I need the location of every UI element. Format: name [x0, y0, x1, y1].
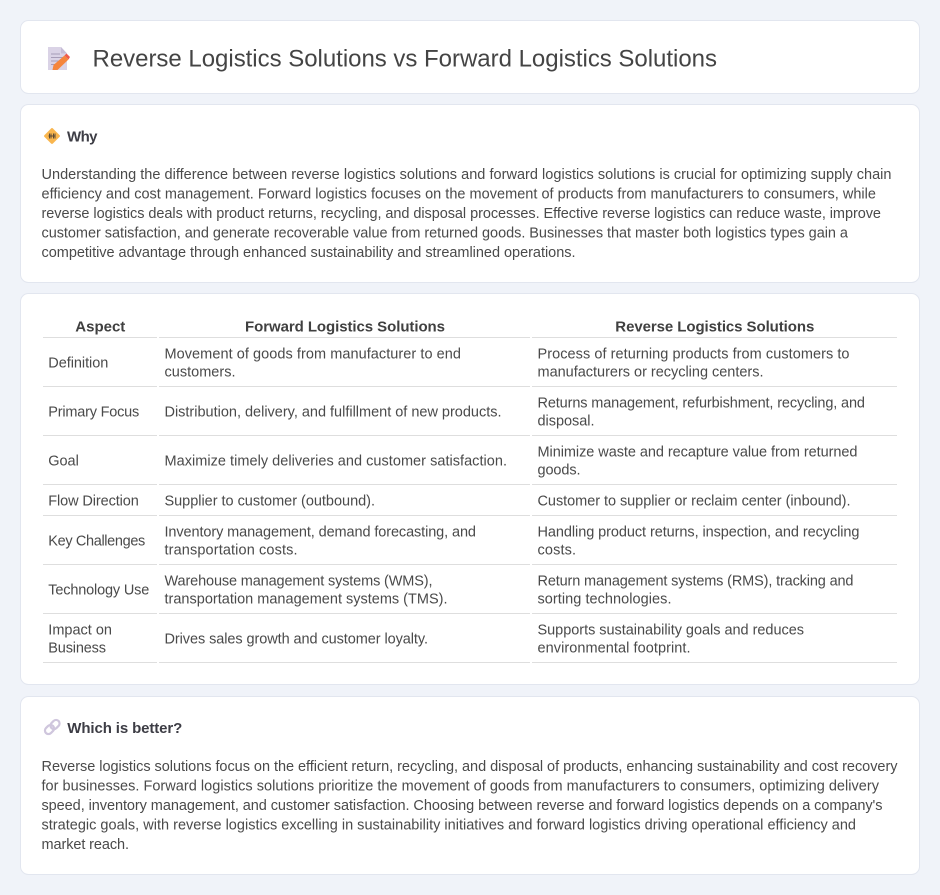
row: key challenges: transportation costs. — [164, 542, 298, 558]
icon: chain link — [43, 718, 61, 736]
row: flow direction: Customer to supplier or reclaim center (inbound). — [538, 494, 850, 510]
row: goal: Goal — [48, 454, 79, 470]
row: impact on business: environmental footprint. — [538, 640, 690, 656]
panel: which is better — [20, 696, 920, 874]
row: goal — [48, 444, 858, 478]
text block: why explanation — [42, 167, 892, 261]
text block: why explanation: efficiency and cost management. Forward logistics focuses on the movement of products from manufacturers to consumers, while — [42, 186, 876, 202]
row: technology use — [48, 574, 854, 608]
row: primary focus: Distribution, delivery, and fulfillment of new products. — [164, 404, 502, 420]
row: flow direction — [48, 494, 851, 510]
row: definition: manufacturers or recycling centers. — [538, 364, 764, 380]
row: key challenges: Handling product returns, inspection, and recycling — [538, 524, 860, 540]
text block: which is better explanation: Reverse logistics solutions focus on the efficient return, recycling, and disposal of products, enhancing sustainability and cost recovery — [42, 759, 898, 775]
heading: which is better: Which is better? — [67, 720, 182, 737]
text block: why explanation: reverse logistics deals with product returns, recycling, and disposal processes. Effective reverse logistics can reduce waste, improve — [42, 206, 881, 222]
row: impact on business — [48, 622, 804, 656]
row: goal: Minimize waste and recapture value from returned — [538, 444, 858, 460]
row: key challenges: Inventory management, demand forecasting, and — [164, 524, 476, 540]
table header row: Aspect — [75, 318, 125, 336]
row: impact on business: Impact on — [48, 622, 112, 638]
row: impact on business: Drives sales growth and customer loyalty. — [164, 632, 428, 648]
text block: which is better explanation: market reach. — [42, 837, 129, 853]
row: primary focus: Primary Focus — [48, 404, 139, 420]
text block: why explanation: competitive advantage through enhanced sustainability and streamlined operations. — [42, 245, 576, 261]
table header row: Reverse Logistics Solutions — [615, 318, 814, 336]
row: impact on business: Supports sustainability goals and reduces — [538, 622, 804, 638]
row: technology use: Return management systems (RMS), tracking and — [538, 574, 854, 590]
icon: warning diamond — [44, 128, 60, 144]
row: key challenges: Key Challenges — [48, 534, 145, 550]
row: technology use: Technology Use — [48, 582, 149, 598]
heading: why: Why — [67, 128, 98, 146]
text block: which is better explanation — [42, 759, 898, 853]
text block: why explanation: customer satisfaction, and generate recoverable value from returned goods. Businesses that master both logistics types gain a — [42, 226, 849, 242]
text block: which is better explanation: strategic goals, with reverse logistics excelling in sustainability initiatives and forward logistics driving operational efficiency and — [42, 818, 856, 834]
row: definition — [48, 346, 850, 380]
icon: document with pencil — [48, 47, 70, 70]
panel: title header — [20, 20, 920, 94]
row: flow direction: Supplier to customer (outbound). — [164, 494, 375, 510]
row: definition: Movement of goods from manufacturer to end — [164, 346, 461, 362]
text block: which is better explanation: for businesses. Forward logistics solutions prioritize the movement of goods from manufacturers to consumers, optimizing delivery — [42, 778, 880, 794]
row: key challenges: costs. — [538, 542, 576, 558]
table header row — [75, 318, 814, 336]
row: definition: Process of returning products from customers to — [538, 346, 850, 362]
row: key challenges — [48, 524, 860, 558]
row: impact on business: Business — [48, 640, 106, 656]
row: goal: Maximize timely deliveries and customer satisfaction. — [164, 454, 507, 470]
row: goal: goods. — [538, 462, 580, 478]
panel: comparison table — [20, 294, 920, 684]
text block: which is better explanation: speed, inventory management, and customer satisfaction. Choosing between reverse and forward logistics depends on a company's — [42, 798, 882, 814]
row: definition: customers. — [164, 364, 236, 380]
text block: why explanation: Understanding the difference between reverse logistics solutions and forward logistics solutions is crucial for optimizing supply chain — [42, 167, 892, 183]
row: technology use: transportation management systems (TMS). — [164, 592, 448, 608]
row: definition: Definition — [48, 356, 108, 372]
row: primary focus: Returns management, refurbishment, recycling, and — [538, 396, 865, 412]
row: primary focus: disposal. — [538, 414, 594, 430]
row: technology use: sorting technologies. — [538, 592, 672, 608]
row: technology use: Warehouse management systems (WMS), — [164, 574, 432, 590]
panel: why — [20, 104, 920, 282]
title: Reverse Logistics Solutions vs Forward Logistics Solutions — [92, 46, 717, 72]
row: primary focus — [48, 396, 865, 430]
row: flow direction: Flow Direction — [48, 494, 139, 510]
table header row: Forward Logistics Solutions — [245, 318, 445, 336]
